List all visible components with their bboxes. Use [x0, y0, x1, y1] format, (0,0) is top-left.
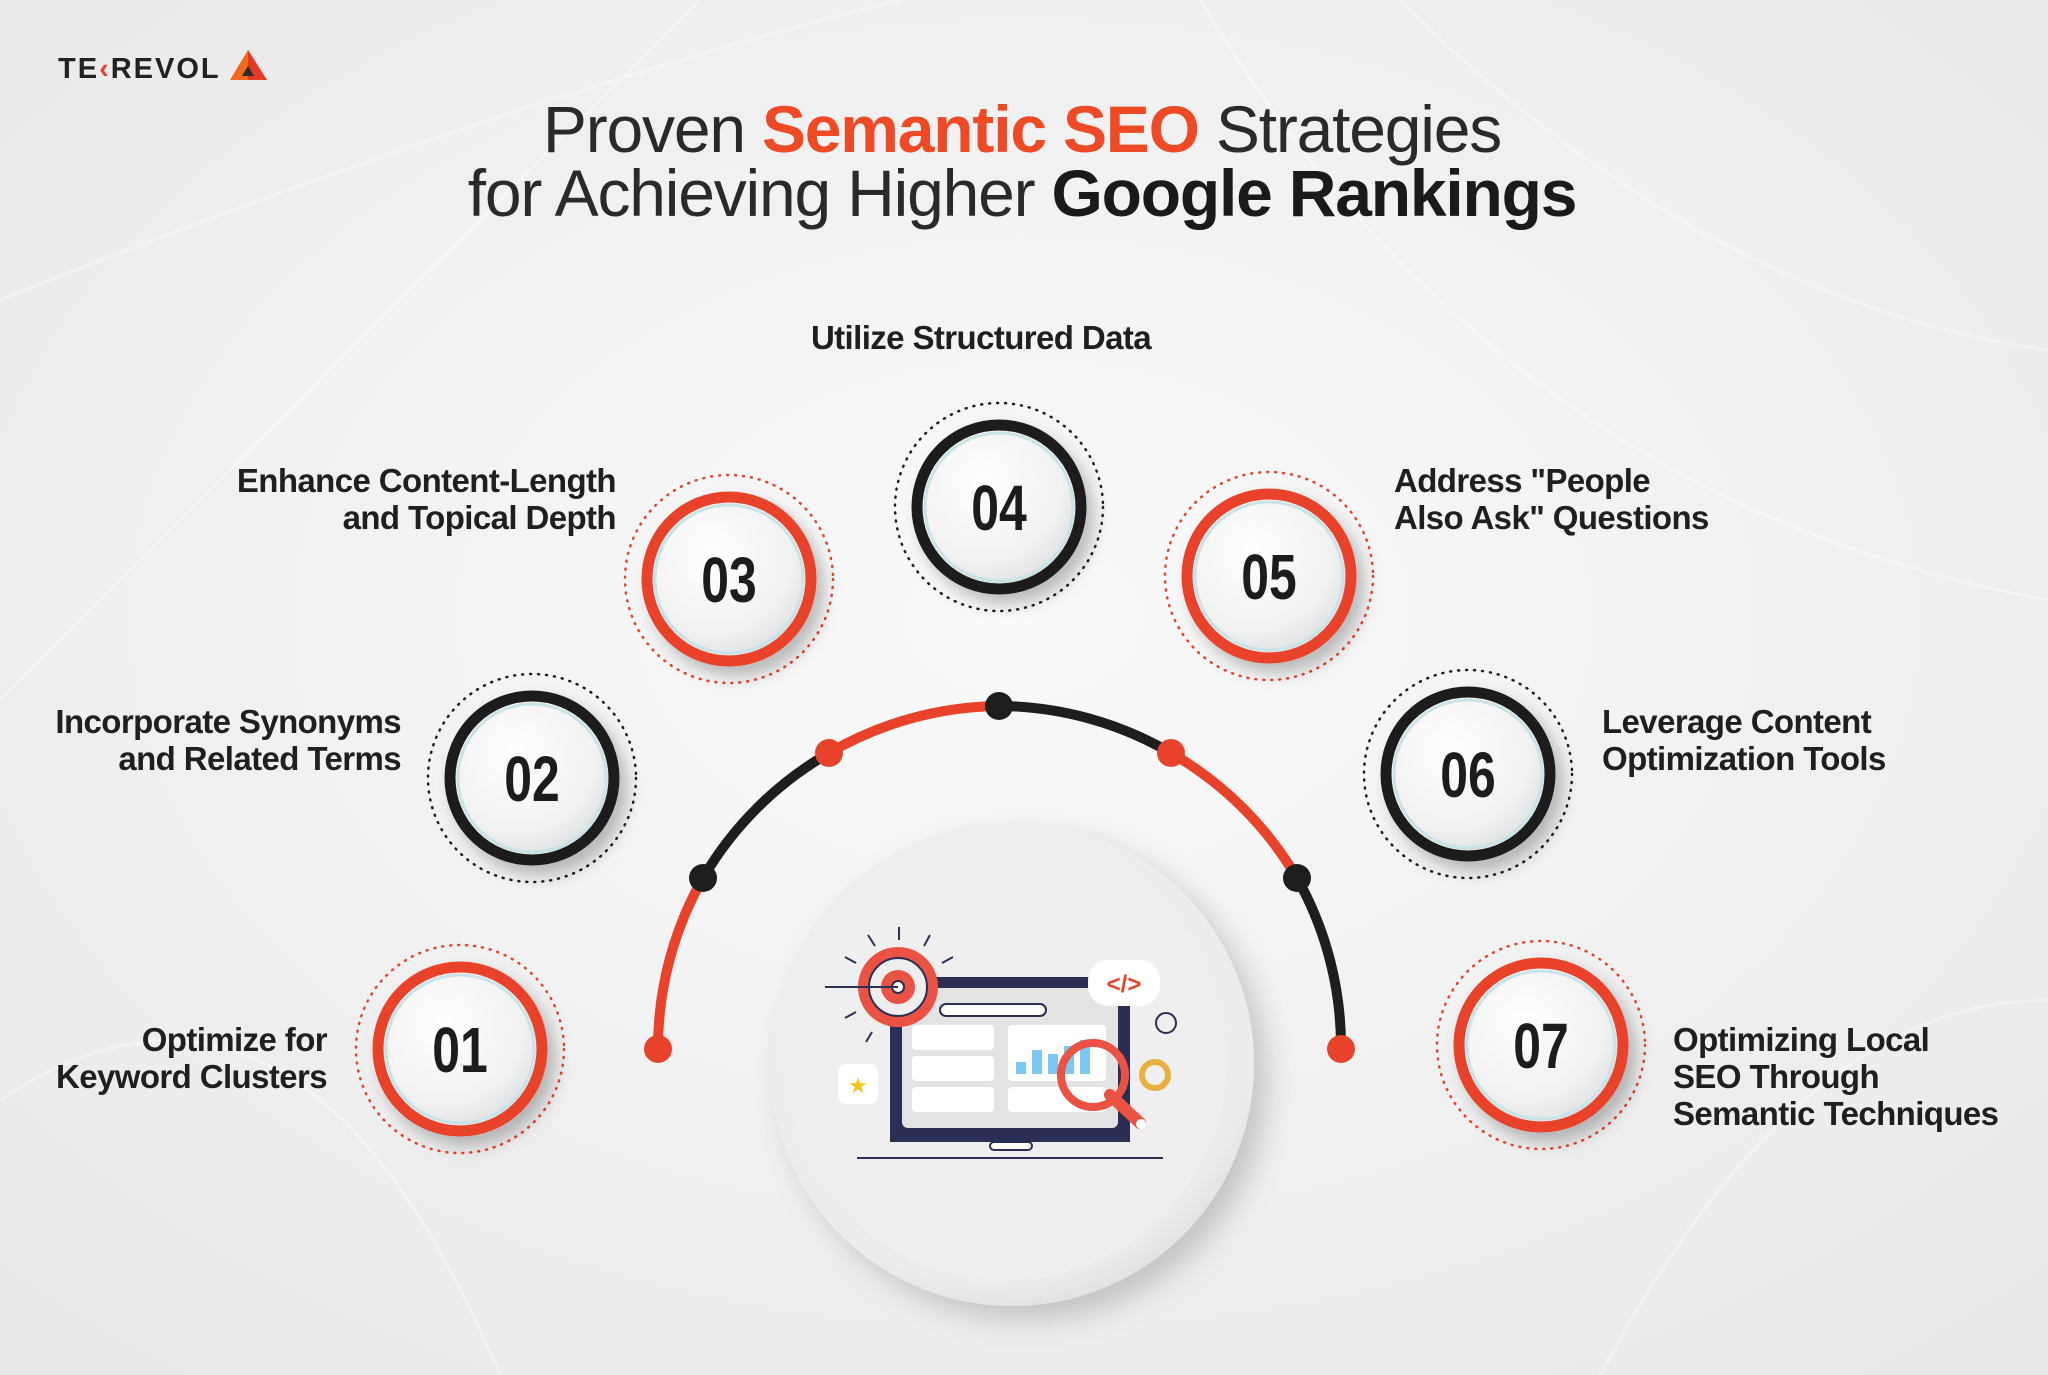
- label 07: Semantic Techniques: [1673, 1095, 1998, 1132]
- laptop: [857, 977, 1163, 1158]
- label 07: SEO Through: [1673, 1058, 1879, 1095]
- icon: magnifier: [1061, 1043, 1146, 1129]
- label 02: Incorporate Synonyms: [55, 703, 401, 740]
- label 07: Optimizing Local: [1673, 1021, 1929, 1058]
- circle 01: 01: [432, 1015, 488, 1086]
- label 04: Utilize Structured Data: [811, 319, 1152, 356]
- logo: TE‹REVOL: [58, 53, 221, 85]
- circle 02: 02: [504, 744, 560, 815]
- circle 03: 03: [701, 545, 757, 616]
- icon: code bubble: </>: [1107, 971, 1141, 998]
- icon: target: [825, 927, 953, 1042]
- icon: star bubble: [838, 1064, 878, 1104]
- label 01: Keyword Clusters: [56, 1058, 327, 1095]
- label 05: Address "People: [1394, 462, 1650, 499]
- circle 06: 06: [1440, 740, 1496, 811]
- circle 07: 07: [1513, 1011, 1569, 1082]
- label 03: and Topical Depth: [343, 499, 616, 536]
- label 05: Also Ask" Questions: [1394, 499, 1709, 536]
- label 06: Optimization Tools: [1602, 740, 1886, 777]
- circle 04: 04: [971, 473, 1027, 544]
- center illustration: [770, 822, 1254, 1306]
- circle 02: [428, 674, 636, 882]
- circle 03: [625, 475, 833, 683]
- label 06: Leverage Content: [1602, 703, 1872, 740]
- label 02: and Related Terms: [118, 740, 401, 777]
- title: Proven Semantic SEO Strategies: [543, 92, 1501, 166]
- icon: code bubble: [1088, 960, 1160, 1006]
- circle 01: [356, 945, 564, 1153]
- label 01: Optimize for: [142, 1021, 328, 1058]
- arc: [644, 692, 1355, 1063]
- icon: star bubble: ★: [848, 1073, 868, 1098]
- circle 05: 05: [1241, 542, 1297, 613]
- circle 05: [1165, 472, 1373, 680]
- title: [468, 92, 1576, 230]
- circle 04: [895, 403, 1103, 611]
- circle 07: [1437, 941, 1645, 1149]
- circle 06: [1364, 670, 1572, 878]
- title: for Achieving Higher Google Rankings: [468, 156, 1576, 230]
- label 03: Enhance Content-Length: [237, 462, 616, 499]
